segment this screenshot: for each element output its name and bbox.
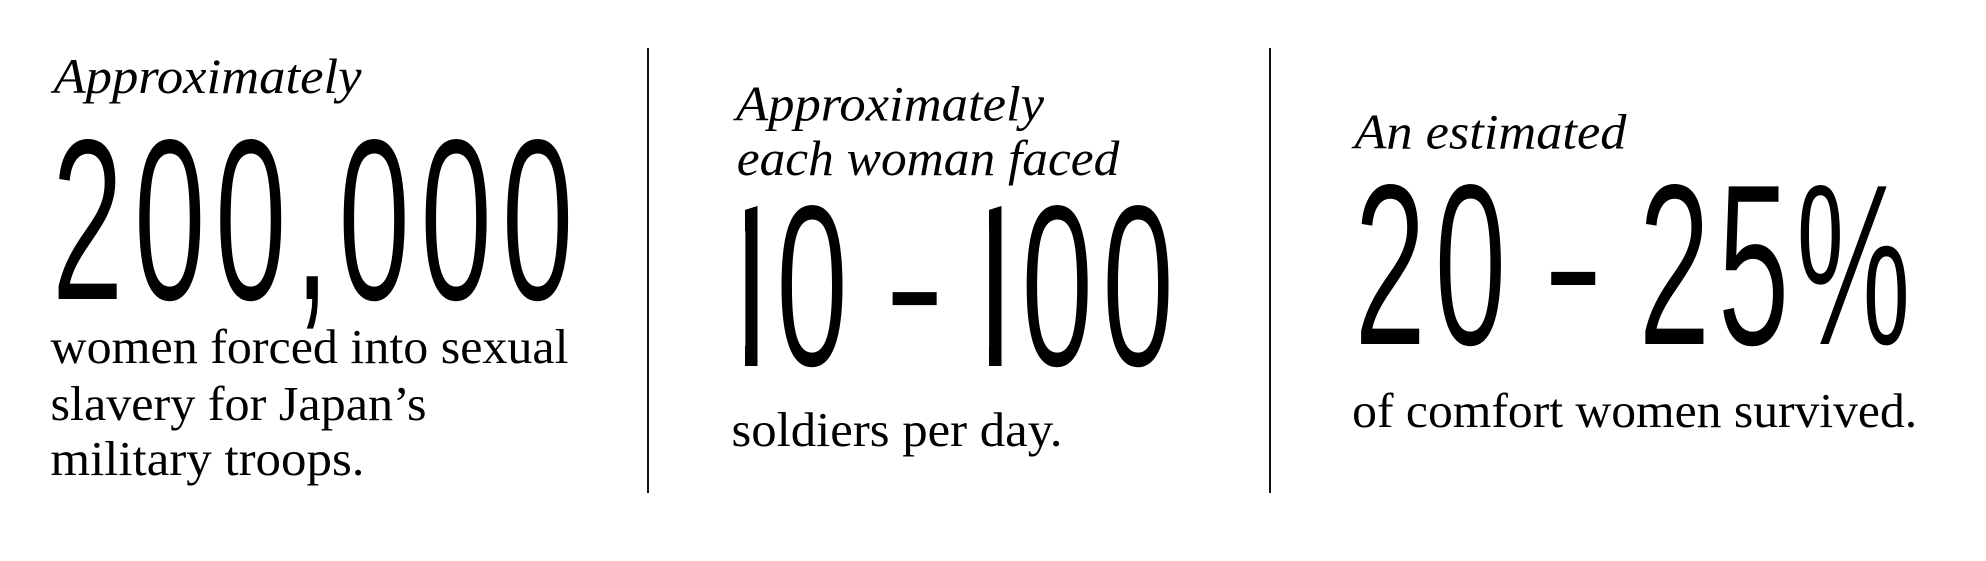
big number: 10 - 100: 1 [958, 156, 1030, 415]
description: women forced into sexual slavery: women forced into sexual [50, 319, 568, 374]
big number: 20 - 25%: 25% [1638, 135, 1911, 394]
lead-in: Approximately: Approximately [50, 48, 362, 104]
description: women forced into sexual slavery: slavery for Japan’s [50, 376, 426, 431]
big number: 10 - 100: 0 [776, 156, 848, 415]
big number: 20 - 25%: - [1543, 172, 1603, 358]
panel: total women forced [50, 48, 574, 486]
big number: 20 - 25%: 20 [1354, 135, 1507, 394]
lead-in: Approximately each woman faced [733, 76, 1120, 186]
description: women forced into sexual slavery: military troops. [50, 431, 364, 486]
big number: 10 - 100: 00 [1021, 156, 1174, 415]
lead-in: An estimated: An estimated [1351, 104, 1627, 160]
lead-in: Approximately each woman faced: each woman faced [737, 130, 1120, 186]
description: soldiers per day: soldiers per day. [732, 402, 1062, 457]
panel: soldiers per day [714, 76, 1174, 457]
lead-in: Approximately each woman faced: Approximately [733, 76, 1045, 132]
big number: 10 - 100: 1 [714, 156, 786, 415]
big number: 10 - 100: - [885, 192, 945, 379]
big number: 10 - 100 [745, 205, 1169, 368]
big number: 20 - 25% [1354, 135, 1911, 394]
big number: 200,000: 200,000 [52, 90, 574, 349]
panel: survival rate [1351, 104, 1917, 438]
description: women forced into sexual slavery [50, 319, 568, 486]
description: of comfort women survived: of comfort women survived. [1352, 383, 1917, 438]
